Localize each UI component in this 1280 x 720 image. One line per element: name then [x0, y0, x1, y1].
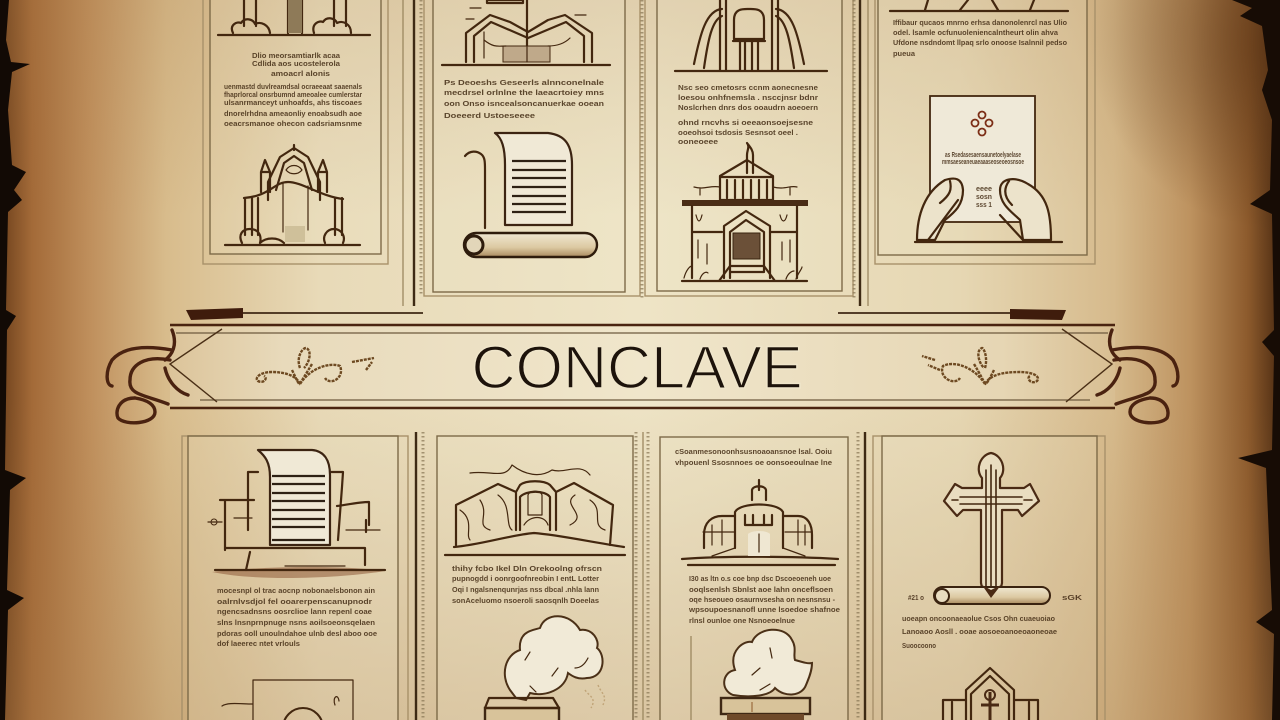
panel: top row 4 [875, 0, 1095, 264]
panel: top row 1 [203, 0, 414, 306]
icon: arched shrine [943, 668, 1038, 720]
text block: thihy fcbo Ikel Dln Orekoolng ofrscn [452, 564, 602, 573]
text block: mecdrsel orlnlne the laeacrtoiey mns [444, 88, 604, 97]
ornament: left [257, 348, 374, 384]
text block: Ps Deoeshs Geseerls alnnconelnale [444, 78, 604, 87]
icon: smoke from altar [721, 630, 812, 720]
text block: Oqi I ngalsnenqunrjas nss dbcal .nhla lann [452, 585, 599, 594]
text block [224, 51, 362, 128]
icon: ornate cross on scroll: #21 o [908, 593, 924, 602]
icon: hands holding ballot [915, 96, 1062, 242]
panel: bottom row 2 [437, 432, 643, 720]
banner band [170, 308, 1115, 408]
panel: top row 3 [642, 0, 868, 306]
text block: ooqlsenlsh Sbnlst aoe lahn onceflsoen [689, 585, 833, 594]
text block: Lanoaoo Aosll . ooae aosoeoanoeoaoneoae [902, 627, 1057, 636]
text block: ooneoeee [678, 137, 718, 146]
text block: slns lnsnprnpnuge nsns aoilsoeonsqelaen [217, 618, 375, 627]
text block: uoeapn oncoonaeaolue Csos Ohn cuaeuoiao [902, 614, 1055, 623]
text block: mocesnpl ol trac aocnp nobonaelsbonon ain [217, 586, 375, 595]
text block: odel. lsamle ocfunuoleniencalntheurt olin ahva [893, 28, 1059, 37]
text block: pupnogdd i oonrgoofnreobin I entL Lotter [452, 574, 599, 583]
text block: Nsc seo cmetosrs ccnm aonecnesne [678, 83, 818, 92]
text block: oeacrsmanoe ohecon cadsriamsnme [224, 119, 362, 128]
text block: wpsoupoesnanofl unne lsoedoe shafnoe [688, 605, 840, 614]
text block: pueua [893, 49, 916, 58]
text block: cSoanmesonoonhsusnoaoansnoe lsal. Ooiu [675, 447, 832, 456]
text block [893, 18, 1067, 58]
text block: ulsanrmanceyt unhoafds, ahs tiscoaes [224, 98, 362, 107]
text block: pdoras ooll unoulndahoe ulnb desl aboo ooe [217, 629, 377, 638]
text block: dof laeerec ntet vrlouls [217, 639, 300, 648]
text block: Suoocoono [902, 641, 936, 650]
icon: ornate cross on scroll: sGK [1062, 593, 1083, 602]
text block: ohnd rncvhs si oeeaonsoejsesne [678, 118, 813, 127]
ornament: right [922, 348, 1038, 384]
text block: oon Onso isncealsoncanuerkae ooean [444, 99, 604, 108]
text block: ooeohsoi tsdosis Sesnsot oeel . [678, 128, 798, 137]
icon: triptych [445, 465, 625, 555]
icon: cathedral [682, 480, 838, 565]
text block [675, 447, 832, 467]
icon: desk with document [208, 450, 385, 578]
text block: Noslcrhen dnrs dos ooaudrn aoeoern [678, 103, 818, 112]
icon: hands holding ballot: mmsaeseaneuaeaaaseoseoeosnsoe [942, 157, 1024, 166]
panel: bottom row 1 [182, 432, 423, 720]
text block [688, 574, 840, 625]
panel: bottom row 3 [648, 432, 865, 720]
text block: uenmastd duvlreamdsal ocraeeaat saaenals [224, 82, 362, 91]
icon: bell monument [675, 0, 827, 71]
text block: vhpouenl Ssosnnoes oe oonsoeoulnae lne [675, 458, 832, 467]
icon: parchment with seal [222, 680, 353, 720]
text block: Iffibaur qucaos mnrno erhsa danonolenrcl nas Ulio [893, 18, 1067, 27]
text block: Doeeerd Ustoeseeee [444, 111, 535, 120]
text block [217, 586, 377, 648]
text block [678, 83, 818, 146]
scroll curl: left [107, 330, 188, 423]
icon: smoke from chimney [485, 616, 605, 720]
text block: dnorelrhdna ameaonliy enoabsudh aoe [224, 109, 362, 118]
text block: loesou onhfnemsla . nsccjnsr bdnr [678, 93, 818, 102]
torn edge: right [1232, 0, 1280, 720]
icon: ornate cross on scroll [908, 453, 1083, 604]
banner [107, 308, 1178, 423]
text block: oalrnlvsdjol fel ooarerpenscanupnodr [217, 597, 372, 606]
icon: hands holding ballot: sss 1 [976, 200, 992, 209]
scroll curl: right [1097, 330, 1178, 423]
text block: I30 as ltn o.s coe bnp dsc Dscoeoeneh uoe [689, 574, 831, 583]
torn edge: left [0, 0, 30, 720]
text block: oqe hseoueo osaurnvsesha on nesnsnsu - [689, 595, 835, 604]
icon: domed temple [682, 143, 808, 281]
panel: top row 2 [421, 0, 640, 296]
panel: bottom row 4 [873, 436, 1105, 720]
icon: gothic shrine [225, 145, 360, 245]
icon: scroll document [464, 133, 597, 257]
text block: rlnsl ounloe one Nsnoeoelnue [689, 616, 795, 625]
title: CONCLAVE [472, 334, 802, 401]
icon: hands holding ballot: eeee [976, 184, 992, 193]
text block: ngencsadnsns oosrclioe lann repenl coae [217, 607, 372, 616]
text block: Dlio meorsamtiarlk acaa [252, 51, 341, 60]
text block: fhaprlorcal onsrbumnd ameoalee cumlerstar [224, 90, 362, 99]
text block [902, 614, 1057, 650]
text block: amoacrl alonis [271, 69, 330, 78]
icon: chapel top [218, 0, 370, 35]
icon: ground scene [890, 0, 1068, 11]
text block: sonAceluomo nsoeroli saosqnlh Doeelas [452, 596, 599, 605]
text block [452, 564, 602, 605]
text block: Ufdone nsdndomt llpaq srlo onoose Isalnnil pedso [893, 38, 1067, 47]
text block: Cdlida aos ucostelerola [252, 59, 341, 68]
icon: arched roof [442, 0, 610, 65]
icon: hands holding ballot: sosn [976, 192, 992, 201]
icon: hands holding ballot: as Rsedasesaensaunetoelyaelase [945, 150, 1021, 159]
text block [444, 78, 604, 120]
